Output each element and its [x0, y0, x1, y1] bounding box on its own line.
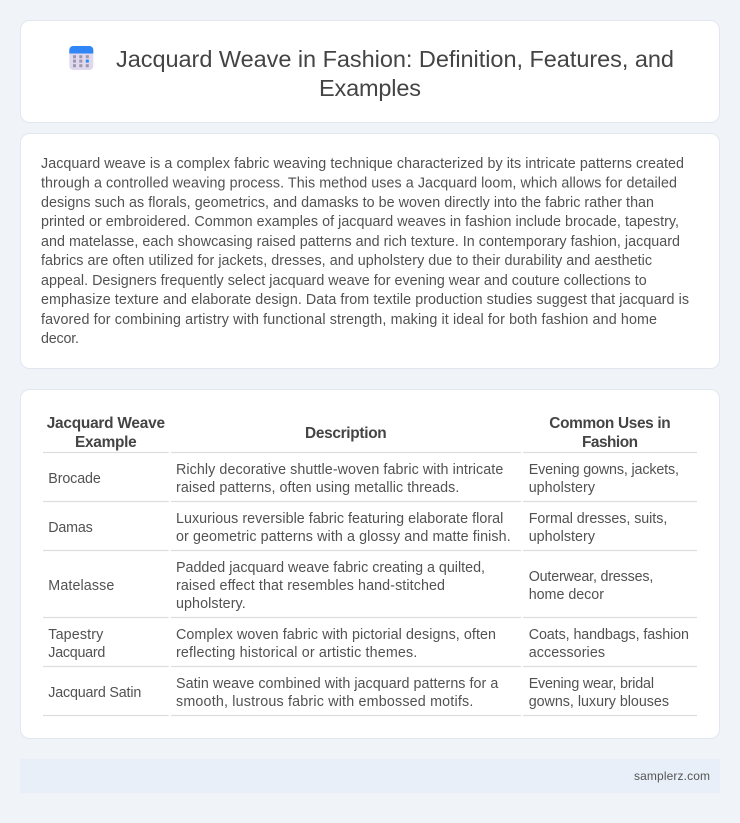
table row: Tapestry Jacquard: Coats, handbags, fashion: [529, 627, 689, 643]
panel: introduction text: designs such as florals, geometrics, and damasks to be woven directly into the fabric rather than: [41, 195, 654, 211]
table row: Damas: Formal dresses, suits,: [529, 511, 667, 527]
table row: Tapestry Jacquard: Jacquard: [48, 645, 105, 661]
table row: Tapestry Jacquard: accessories: [529, 645, 605, 661]
table row: Jacquard Satin: [48, 676, 669, 710]
table header row: Description: [305, 425, 387, 442]
table row: Jacquard Satin: smooth, lustrous fabric with embossed motifs.: [176, 694, 473, 710]
table row: Tapestry Jacquard: reflecting historical or artistic themes.: [176, 645, 417, 661]
footer bar: [20, 759, 720, 793]
table row: Jacquard Satin: gowns, luxury blouses: [529, 694, 669, 710]
table row: Matelasse: Outerwear, dresses,: [529, 569, 653, 585]
table header row: Jacquard Weave: [47, 415, 165, 432]
table row: Damas: [48, 511, 667, 545]
table row: Brocade: Richly decorative shuttle-woven fabric with intricate: [176, 462, 503, 478]
table header row: [47, 415, 671, 451]
table row: Damas: or geometric patterns with a glossy and matte finish.: [176, 529, 511, 545]
table row: Matelasse: [48, 560, 653, 612]
title: Examples: [319, 75, 421, 101]
table row: Jacquard Satin: Satin weave combined with jacquard patterns for a: [176, 676, 498, 692]
panel: introduction text: emphasize texture and elaborate design. Data from textile production studies suggest that jacquard is: [41, 292, 689, 308]
panel: introduction text: fabrics are often utilized for jackets, dresses, and upholstery due to their durability and aesthetic: [41, 253, 652, 269]
table row: Jacquard Satin: Evening wear, bridal: [529, 676, 654, 692]
table row: Brocade: raised patterns, often using metallic threads.: [176, 480, 459, 496]
icon: calendar grid: [69, 46, 93, 70]
panel: examples table: [20, 390, 720, 738]
table row: Damas: upholstery: [529, 529, 596, 545]
table row: Damas: Damas: [48, 520, 93, 536]
table row: Matelasse: home decor: [529, 587, 604, 603]
table row: Matelasse: upholstery.: [176, 596, 246, 612]
table row: Tapestry Jacquard: Complex woven fabric with pictorial designs, often: [176, 627, 496, 643]
table header row: Example: [75, 434, 137, 451]
table row: Brocade: [48, 462, 679, 496]
table header row: Fashion: [582, 434, 638, 451]
table row: Matelasse: Matelasse: [48, 578, 114, 594]
table header row: Common Uses in: [549, 415, 671, 432]
table row: Brocade: Evening gowns, jackets,: [529, 462, 679, 478]
panel: introduction text: appeal. Designers frequently select jacquard weave for evening wear and couture collections to: [41, 273, 647, 289]
footer bar: samplerz.com: [634, 769, 710, 783]
table row: Brocade: Brocade: [48, 471, 101, 487]
table row: Matelasse: raised effect that resembles hand-stitched: [176, 578, 445, 594]
panel: introduction text: Jacquard weave is a complex fabric weaving technique characterized by its intricate patterns created: [41, 156, 684, 172]
panel: introduction text: through a controlled weaving process. This method uses a Jacquard loom, which allows for detailed: [41, 176, 677, 192]
panel: introduction text: favored for combining artistry with functional strength, making it ideal for both fashion and home: [41, 312, 657, 328]
title: [116, 46, 674, 101]
table row: Brocade: upholstery: [529, 480, 596, 496]
panel: introduction text: [20, 134, 720, 368]
panel: introduction text: decor.: [41, 331, 79, 347]
table row: Jacquard Satin: Jacquard Satin: [48, 685, 141, 701]
panel: header: [20, 20, 720, 122]
panel: introduction text: and matelasse, each showcasing raised patterns and rich texture. In contemporary fashion, jacquard: [41, 234, 680, 250]
title: Jacquard Weave in Fashion: Definition, Features, and: [116, 46, 674, 72]
table row: Matelasse: Padded jacquard weave fabric creating a quilted,: [176, 560, 485, 576]
panel: introduction text: printed or embroidered. Common examples of jacquard weaves in fashion include brocade, tapestry,: [41, 214, 679, 230]
table row: Tapestry Jacquard: [48, 627, 689, 661]
table row: Damas: Luxurious reversible fabric featuring elaborate floral: [176, 511, 503, 527]
table row: Tapestry Jacquard: Tapestry: [48, 627, 104, 643]
